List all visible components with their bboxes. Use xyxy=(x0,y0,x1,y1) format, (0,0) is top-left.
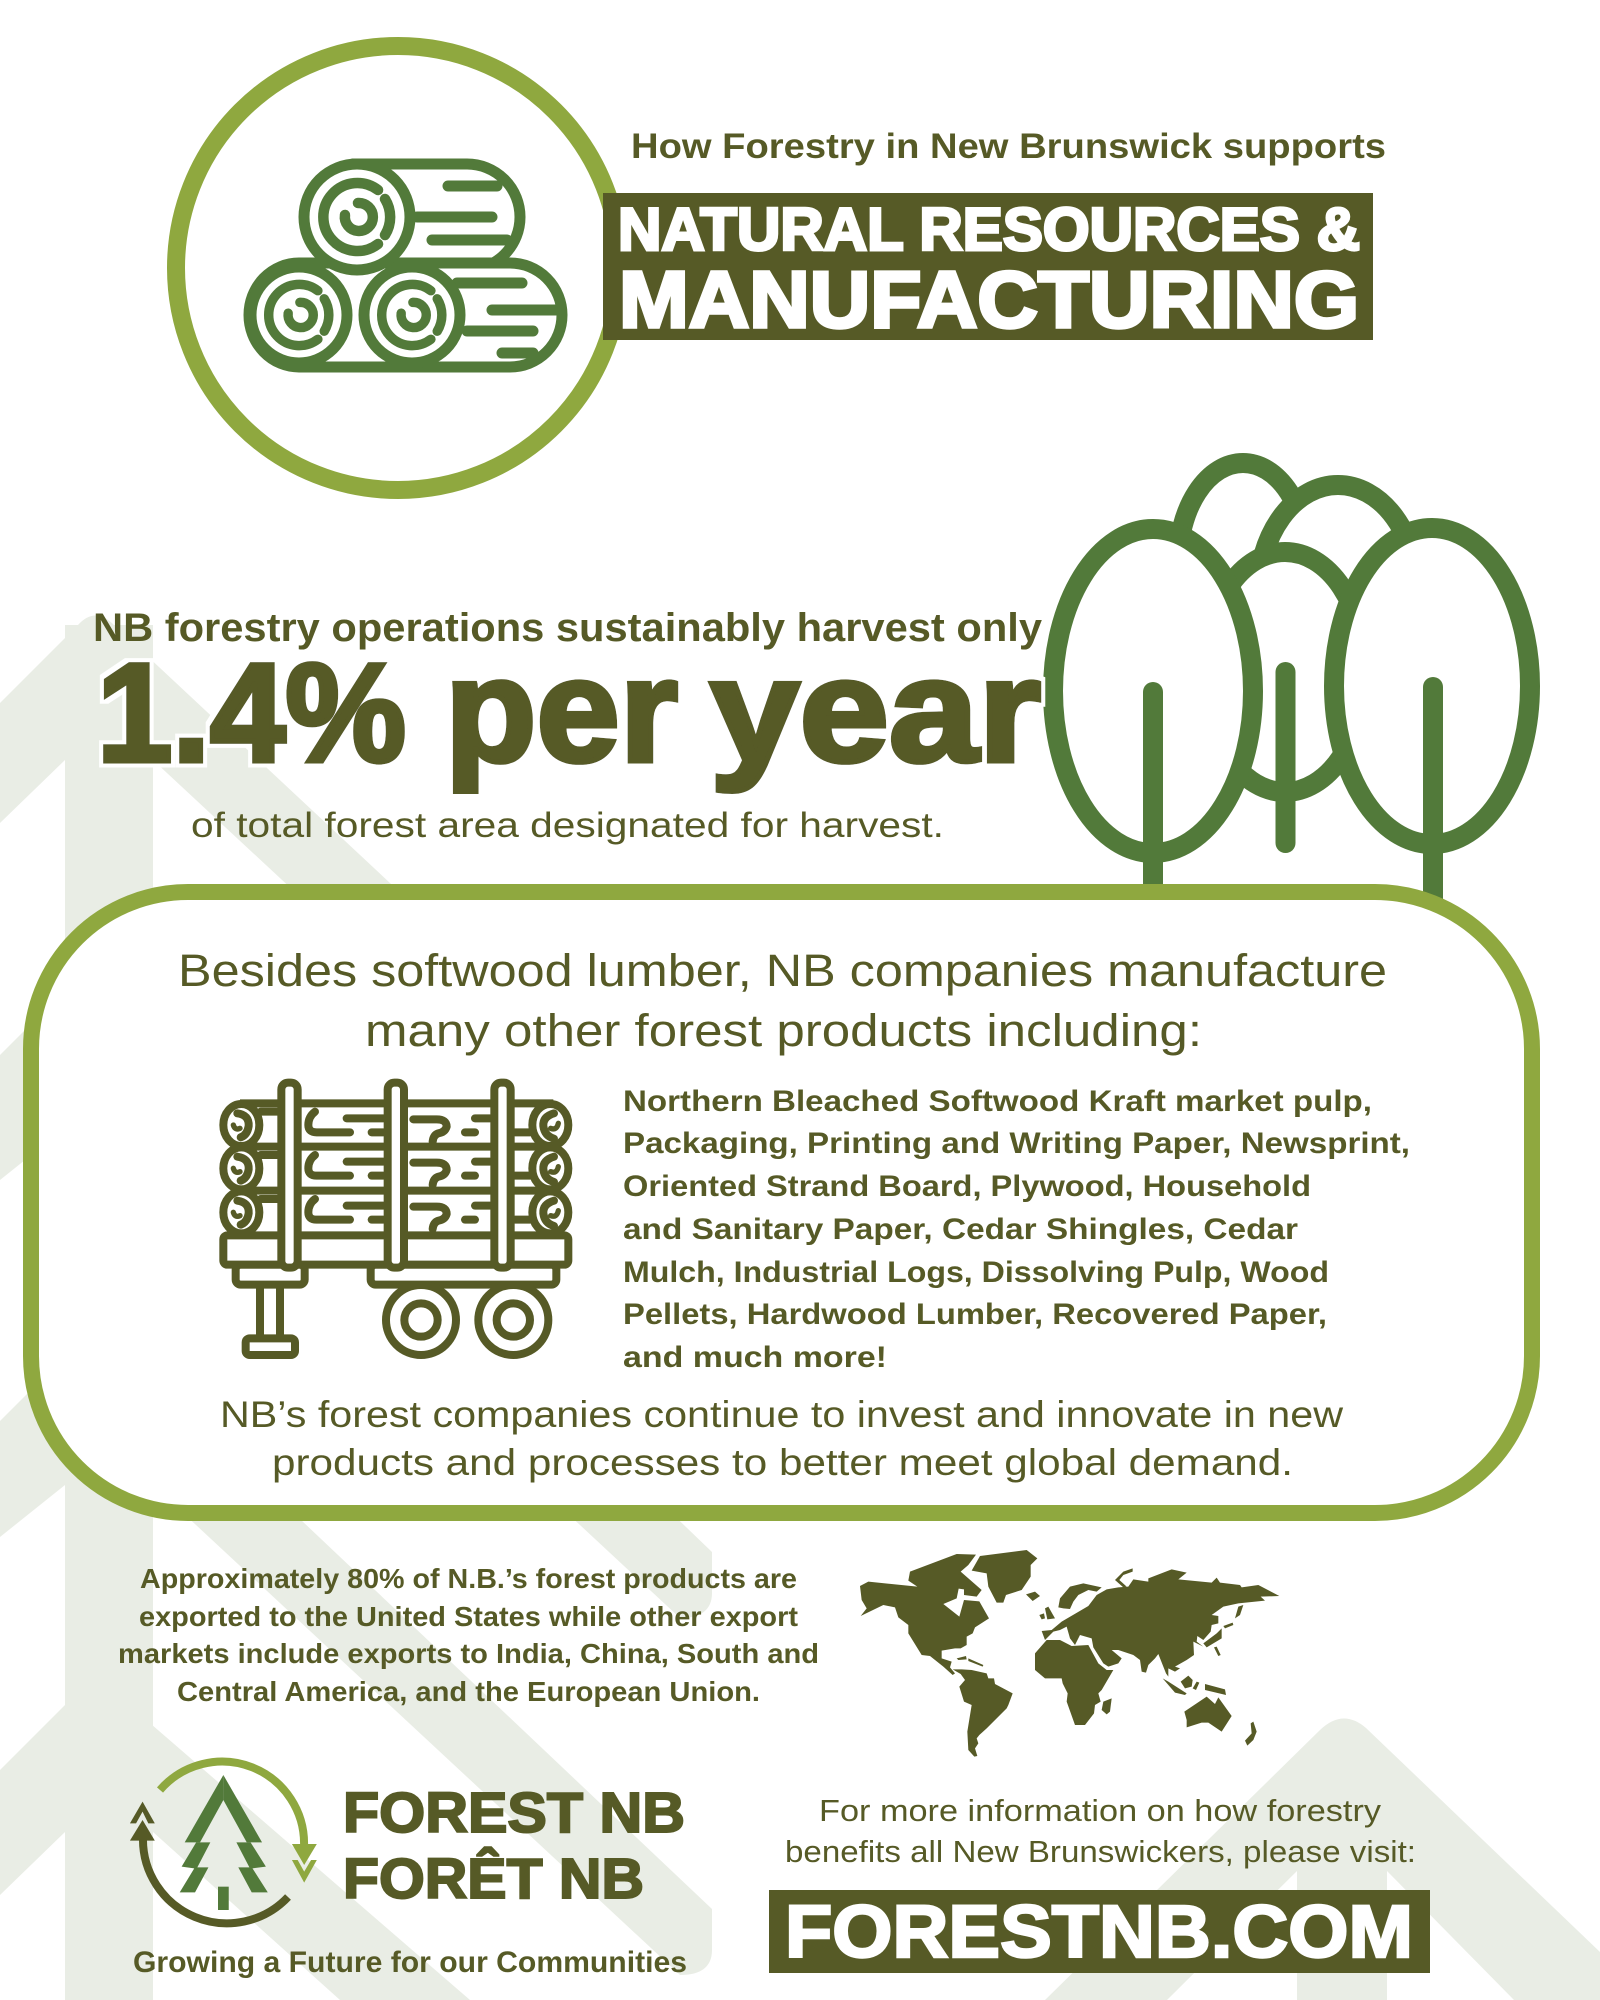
innovation note: NB’s forest companies continue to invest and innovate in new xyxy=(220,1394,1343,1435)
product list: Oriented Strand Board, Plywood, Household xyxy=(623,1170,1311,1203)
product list: Mulch, Industrial Logs, Dissolving Pulp, Wood xyxy=(623,1256,1329,1289)
icon: world map xyxy=(860,1550,1279,1757)
harvest footnote: of total forest area designated for harvest. xyxy=(191,806,944,845)
panel heading xyxy=(178,945,1387,1056)
export text: exported to the United States while other export xyxy=(139,1601,798,1632)
icon: trees xyxy=(1053,463,1530,905)
title banner xyxy=(603,193,1373,344)
export text: Central America, and the European Union. xyxy=(177,1676,760,1707)
tagline: Growing a Future for our Communities xyxy=(133,1946,687,1979)
call to action text: For more information on how forestry xyxy=(819,1793,1382,1828)
panel: forest products xyxy=(31,892,1532,1513)
big stat: 1.4% per year: year xyxy=(710,629,1041,793)
export text: Approximately 80% of N.B.’s forest products are xyxy=(140,1563,797,1594)
innovation note xyxy=(220,1394,1343,1483)
big stat: 1.4% per year xyxy=(97,629,1041,793)
icon: stacked logs xyxy=(249,164,562,367)
panel heading: Besides softwood lumber, NB companies manufacture xyxy=(178,945,1387,996)
logo wordmark xyxy=(343,1781,685,1911)
export text: markets include exports to India, China, South and xyxy=(118,1638,819,1669)
product list: and Sanitary Paper, Cedar Shingles, Cedar xyxy=(623,1213,1298,1246)
logo wordmark: FOREST NB xyxy=(343,1781,685,1845)
intro line: How Forestry in New Brunswick supports xyxy=(631,127,1386,166)
product list xyxy=(623,1085,1410,1374)
harvest statement xyxy=(93,606,1043,793)
harvest statement: NB forestry operations sustainably harvest only xyxy=(93,606,1043,650)
innovation note: products and processes to better meet global demand. xyxy=(272,1442,1293,1483)
header circle ring xyxy=(176,46,620,490)
export text xyxy=(118,1563,819,1707)
title banner: MANUFACTURING xyxy=(619,255,1359,344)
website banner: FORESTNB.COM xyxy=(785,1890,1413,1973)
title banner: NATURAL RESOURCES & xyxy=(618,196,1360,263)
call to action text xyxy=(785,1793,1416,1869)
panel heading: many other forest products including: xyxy=(365,1005,1202,1056)
call to action text: benefits all New Brunswickers, please visit: xyxy=(785,1834,1416,1869)
background chevron pattern xyxy=(0,616,1600,2000)
product list: Pellets, Hardwood Lumber, Recovered Paper, xyxy=(623,1298,1327,1331)
product list: and much more! xyxy=(623,1341,887,1374)
product list: Packaging, Printing and Writing Paper, Newsprint, xyxy=(623,1127,1410,1160)
big stat: 1.4% per year: 1.4% xyxy=(97,634,406,791)
icon: logging trailer xyxy=(223,1083,568,1355)
product list: Northern Bleached Softwood Kraft market pulp, xyxy=(623,1085,1372,1118)
logo: Forest NB emblem xyxy=(130,1762,317,1923)
big stat: 1.4% per year: per xyxy=(445,629,678,793)
logo wordmark: FORÊT NB xyxy=(343,1846,644,1911)
